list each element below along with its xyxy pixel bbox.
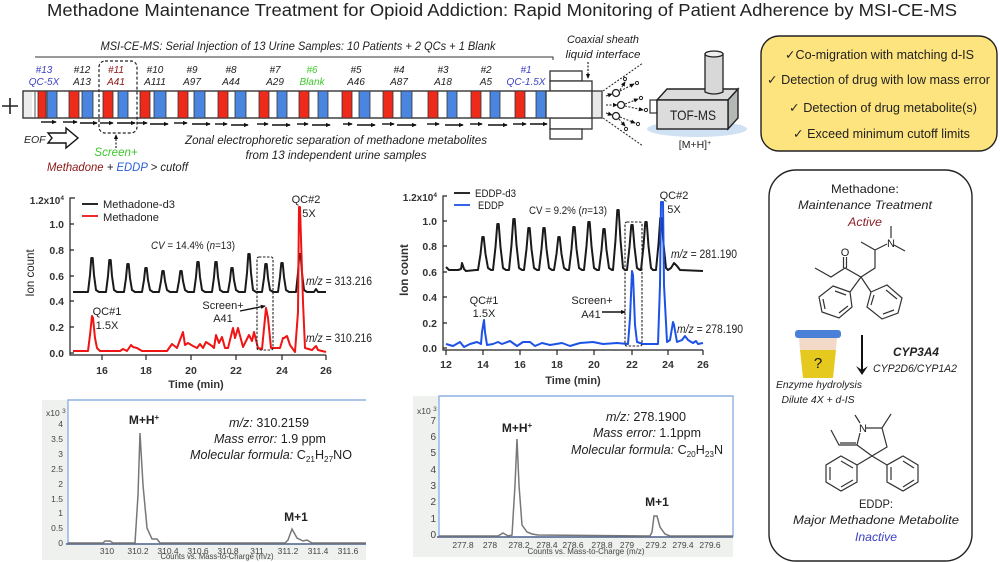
x ticks: 12 [440,359,452,371]
methadone structure [815,226,905,319]
sample labels: A5 [479,77,493,88]
y ticks: 0.6 [49,271,64,283]
y ticks: 4 [58,419,63,429]
QC labels [470,190,688,321]
x ticks: 22 [626,359,638,371]
sample labels: A111 [143,77,166,88]
screen+ arrow [602,311,625,313]
x ticks: 20 [185,365,197,377]
y ticks: 3 [433,406,437,413]
interface label [566,34,640,61]
interface label: liquid interface [566,49,640,61]
spectrum annotation: 23 [705,449,714,459]
y ticks: 6 [430,432,436,443]
sample preparation labels [776,379,863,406]
x axis title: Counts vs. Mass-to-Charge (m/z) [528,546,645,556]
spectrum annotation: H [696,442,705,457]
x ticks: 279.6 [699,540,721,550]
sample labels: A18 [433,77,452,88]
sample labels: #6 [306,65,318,76]
x ticks: 22 [230,365,242,377]
x ticks: 26 [697,359,709,371]
separation caption: from 13 independent urine samples [246,150,427,162]
sample labels: A41 [106,77,125,88]
d3 trace [73,254,326,292]
sample labels: #10 [147,65,164,76]
criteria list: ✓Co-migration with matching d-IS [785,47,974,62]
x ticks: 278.2 [508,540,530,550]
methadone labels [798,182,933,229]
bracket line [35,57,553,60]
EDDP labels [793,497,959,544]
x ticks: 278 [483,540,497,550]
y ticks: 0.8 [49,245,64,257]
legend: Methadone [103,212,159,224]
x ticks: 278.4 [536,540,558,550]
EDDP structure: N [859,423,867,435]
peak labels: + [528,421,532,430]
spectrum annotation: N [714,442,723,457]
y ticks: 0.4 [49,296,64,308]
y ticks [46,408,66,548]
enzyme labels: CYP3A4 [893,345,939,359]
sample labels: QC-5X [29,77,60,88]
y ticks: 0.0 [49,348,64,360]
heading: serial injection: MSI-CE-MS: Serial Injection of 13 Urine Samples: 10 Patients + 2 QCs + 1 Blank [100,41,497,53]
x ticks: 18 [551,359,563,371]
y ticks: 5 [430,448,436,459]
spectrum trace [439,439,733,536]
x ticks: 278.8 [591,540,613,550]
EDDP labels: Inactive [855,530,897,544]
y ticks: 3 [62,408,66,415]
QC labels: Screen+ [571,295,613,307]
peak labels: M+H [502,421,528,435]
electrospray ions [603,63,648,146]
x ticks [452,540,721,550]
EDDP structure [826,414,918,491]
legend [82,199,175,224]
QC labels: QC#2 [660,190,688,202]
sample labels [29,65,546,88]
y ticks: 0.8 [422,241,437,253]
sample preparation labels: Enzyme hydrolysis [776,379,863,391]
spectrum annotation [571,409,723,459]
QC labels: QC#1 [93,306,121,318]
y ticks: 7 [430,416,436,427]
criteria list: ✓ Detection of drug metabolite(s) [789,100,977,115]
x ticks: 310.2 [127,546,149,556]
spectrum annotation: m/z: 278.1900 [606,409,686,424]
y ticks: 1 [430,514,436,525]
methadone labels: Maintenance Treatment [798,198,933,212]
y ticks: 1.0 [422,216,437,228]
mass labels [306,276,372,345]
x ticks: 16 [96,365,108,377]
y ticks: 3 [430,481,436,492]
QC labels [93,194,320,332]
EOF label: EOF [24,134,46,146]
interface label: Coaxial sheath [567,34,639,46]
x ticks: 18 [140,365,152,377]
y ticks: 0.5 [51,523,63,533]
y ticks: 0.2 [422,318,437,330]
y ticks: x10 [417,406,431,416]
sample labels: #7 [269,65,281,76]
spectrum annotation: 21 [306,454,315,464]
criteria list [767,47,990,141]
spectrum annotation: Molecular formula: C [190,447,306,462]
x ticks: 279 [620,540,634,550]
methadone structure: N [887,238,895,250]
EDDP trace [446,202,703,347]
x axis title: Counts vs. Mass-to-Charge (m/z) [160,551,274,561]
sample labels: #9 [186,65,198,76]
spectrum annotation: H [315,447,324,462]
x ticks: 14 [477,359,489,371]
sample labels: #4 [393,65,405,76]
x ticks: 16 [514,359,526,371]
y axis title: Ion count [399,244,411,296]
y ticks: 2 [58,479,63,489]
ion label: + [707,140,711,147]
screen+ label: Screen+ [94,147,138,159]
sample labels: #13 [36,65,53,76]
plus sign [2,98,18,114]
peak labels [502,421,669,509]
x ticks [440,359,709,371]
spectrum annotation: Mass error: 1.9 ppm [214,431,326,446]
cutoff criterion: Methadone + EDDP > cutoff [47,162,190,174]
QC labels: 5X [667,204,681,216]
methadone labels: Active [847,215,882,229]
dashed highlight: sample 11 [99,61,137,133]
x ticks: 310.6 [187,546,209,556]
legend: EDDP [478,200,504,212]
d3 trace [446,210,703,271]
chart: methadone electropherogram [25,194,372,391]
y ticks: x10 [46,408,60,418]
TOF-MS instrument [647,51,747,137]
sample labels: #1 [520,65,532,76]
QC labels: A41 [213,313,233,325]
peak labels [129,413,308,524]
spectrum annotation: 20 [687,449,696,459]
x ticks: 24 [662,359,674,371]
y ticks: 4 [433,192,437,199]
QC labels: QC#1 [470,295,498,307]
x ticks: 311.2 [278,546,299,556]
axes [443,196,703,355]
EDDP labels: EDDP: [859,497,893,511]
enzyme labels: CYP2D6/CYP1A2 [873,363,957,375]
separation caption: Zonal electrophoretic separation of methadone metabolites [184,135,487,147]
y axis title: Ion count [25,249,37,297]
x ticks: 279.2 [645,540,667,550]
sample labels: #11 [108,65,124,76]
sample labels: A97 [182,77,201,88]
screen+ arrow [240,306,265,311]
chart: EDDP electropherogram [399,188,743,387]
separation caption [184,135,487,162]
panel: sheath liquid interface and TOF-MS [546,34,747,151]
y ticks: 4 [430,465,436,476]
x ticks: 26 [320,365,332,377]
mass labels: m/z = 313.216 [306,276,372,288]
criteria list: ✓ Detection of drug with low mass error [767,72,990,87]
legend: Methadone-d3 [103,199,175,211]
TOF-MS instrument: TOF-MS [670,107,716,123]
sample labels: A29 [265,77,284,88]
CV annotation: CV = 9.2% (n=13) [529,205,607,217]
x ticks: 310.4 [157,546,179,556]
peak labels: M+H [129,413,154,427]
y ticks [30,195,64,360]
enzyme labels [873,345,957,375]
axes [70,198,326,360]
panel: methadone mass spectrum [42,400,366,561]
methadone structure: O [841,247,850,259]
x ticks: 310 [100,546,114,556]
mass labels: m/z = 281.190 [671,249,737,261]
sample labels: #12 [74,65,91,76]
migration arrows [41,122,547,125]
panel: identification criteria [761,36,997,151]
urine cup icon: ? [814,355,822,372]
y ticks: 1.2x10 [403,193,433,204]
spectrum annotation [190,415,352,464]
y ticks: 2 [430,497,436,508]
QC labels: 1.5X [96,320,119,332]
x axis title: Time (min) [545,375,601,387]
sample labels: #5 [350,65,362,76]
methadone labels: Methadone: [831,182,899,196]
methadone trace [73,207,326,352]
x ticks: 311.6 [338,546,359,556]
panel: metabolism [769,170,972,561]
EDDP labels: Major Methadone Metabolite [793,513,959,527]
metabolism arrow [856,335,868,375]
sample labels: A44 [221,77,240,88]
x ticks: 279.4 [672,540,694,550]
sample labels: #3 [437,65,449,76]
mass labels: m/z = 310.216 [306,333,372,345]
x ticks: 20 [588,359,600,371]
y ticks: 0.0 [422,343,437,355]
spectrum annotation: 27 [324,454,333,464]
spectrum annotation: Mass error: 1.1ppm [593,425,701,440]
y ticks: 0.4 [422,292,437,304]
peak labels: M+1 [645,495,669,509]
sample labels: A13 [72,77,91,88]
x ticks: 311.4 [308,546,329,556]
y ticks: 1.2x10 [30,196,60,207]
sample labels: A46 [346,77,365,88]
spectrum annotation: m/z: 310.2159 [229,415,309,430]
legend [454,188,516,212]
peak labels: M+1 [284,510,308,524]
y ticks: 0 [58,538,63,548]
y ticks: 3.5 [51,434,63,444]
y ticks [403,192,437,355]
y ticks: 3 [58,449,63,459]
QC labels: 5X [302,208,316,220]
x ticks: 310.8 [217,546,239,556]
ion label: [M+H] [679,139,707,151]
QC labels: 1.5X [473,308,496,320]
spectrum annotation: Molecular formula: C [571,442,687,457]
sample preparation labels: Dilute 4X + d-IS [782,394,854,406]
panel: serial injection capillary schematic [2,41,553,174]
y ticks: 4 [60,195,64,202]
CV annotation: CV = 14.4% (n=13) [151,240,235,252]
mass labels: m/z = 278.190 [677,324,743,336]
mass labels [671,249,743,336]
y ticks: 1.0 [49,219,64,231]
interface pointer [587,62,589,78]
coaxial interface [546,71,602,139]
y ticks: 2.5 [51,464,63,474]
sample labels: A87 [389,77,408,88]
x ticks: 311 [250,546,264,556]
sample labels: #2 [480,65,492,76]
EOF arrow [48,128,78,148]
peak labels: + [154,413,160,422]
sample labels: QC-1.5X [507,77,546,88]
y ticks: 1 [58,508,63,518]
capillary with sample zones [23,91,546,118]
QC labels: QC#2 [292,194,320,206]
QC labels: Screen+ [202,300,244,312]
y ticks [417,406,437,541]
dashed highlight [625,222,642,346]
spectrum trace [68,433,366,543]
x ticks [100,546,359,556]
x ticks [96,365,332,377]
screen+ pointer arrow [115,135,117,148]
y ticks: 0 [430,530,436,541]
dashed highlight [257,257,273,350]
criteria list: ✓ Exceed minimum cutoff limits [793,126,970,141]
legend: EDDP-d3 [475,188,516,200]
y ticks: 0.2 [49,322,64,334]
QC labels: A41 [581,309,601,321]
panel: EDDP mass spectrum [413,396,733,557]
title: Methadone Maintenance Treatment for Opioid Addiction: Rapid Monitoring of Patient Adherence by MSI-CE-MS [47,0,957,20]
sample labels: #8 [225,65,237,76]
spectrum annotation: NO [333,447,352,462]
y ticks: 0.6 [422,267,437,279]
sample labels: Blank [299,77,326,88]
x ticks: 278.6 [562,540,584,550]
x ticks: 277.8 [452,540,474,550]
x axis title: Time (min) [168,379,224,391]
y ticks: 1.5 [51,494,63,504]
x ticks: 24 [276,365,288,377]
urine cup icon [795,330,841,378]
